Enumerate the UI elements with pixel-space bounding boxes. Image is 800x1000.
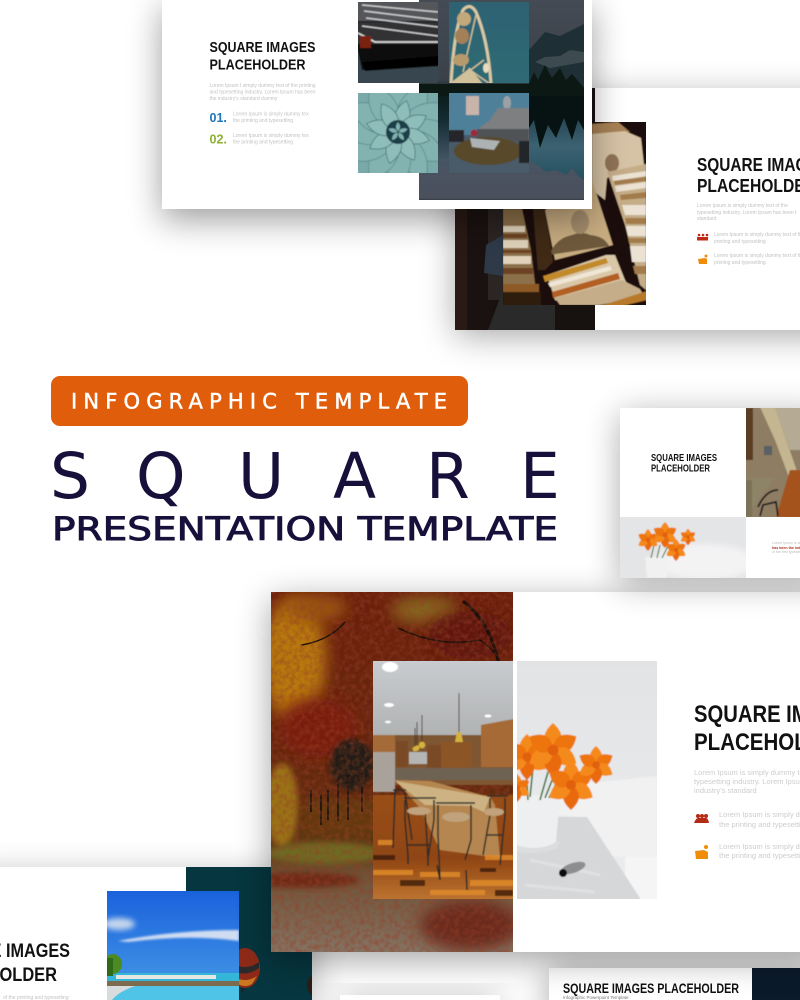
icon: people group xyxy=(694,814,709,823)
text block: slide three caption xyxy=(772,541,800,554)
panel: slide with dark teal and beach (bottom left) xyxy=(0,867,312,1000)
photo: orange lilies in vase xyxy=(517,661,657,899)
subtitle: presentation template: PRESENTATION TEMPLATE xyxy=(52,510,558,548)
text block: slide two description xyxy=(697,203,797,222)
text block: item 01: Lorem Ipsum is simply dummy tex xyxy=(233,112,309,118)
text block: item 01 xyxy=(233,112,309,124)
photo: tropical beach xyxy=(107,891,239,1000)
panel: partly visible slide (bottom centre) xyxy=(340,995,500,1000)
panel: small slide with flowers (right) xyxy=(619,407,800,584)
text block: slide two description: typesetting industry. Lorem Ipsum has been t xyxy=(697,210,797,216)
badge: infographic template xyxy=(51,376,468,426)
number: 02: 02. xyxy=(210,132,227,146)
heading: slide four title xyxy=(694,701,800,756)
heading: slide six title: SQUARE IMAGES PLACEHOLDER xyxy=(563,981,739,996)
heading: slide three title xyxy=(651,453,717,474)
photo: kitchen interior xyxy=(373,661,513,899)
text block: slide two description: Lorem Ipsum is simply dummy text of the xyxy=(697,203,788,209)
text block: item 01: the printing and typesetting xyxy=(233,118,293,124)
text block: slide four description xyxy=(694,768,800,795)
heading: slide one title xyxy=(210,40,316,74)
heading: slide one title: PLACEHOLDER xyxy=(210,58,306,74)
text block: slide four item two xyxy=(719,842,800,860)
text block: slide one description: the industry's standard dummy xyxy=(210,96,278,102)
badge: infographic template: INFOGRAPHIC TEMPLATE xyxy=(71,390,447,414)
text block: slide one description xyxy=(210,83,316,102)
photo: succulent xyxy=(358,93,438,173)
number: 01: 01. xyxy=(210,111,227,125)
heading: slide five title xyxy=(0,941,70,1000)
title: square: SQUARE xyxy=(50,440,560,513)
panel: large autumn and kitchen slide xyxy=(240,592,800,960)
photo: hallway with wooden floor xyxy=(746,408,800,517)
photo: head fragment xyxy=(307,976,312,995)
photo: dark brick alley xyxy=(455,88,595,330)
heading: slide three title: PLACEHOLDER xyxy=(651,464,711,474)
panel: slide with old books xyxy=(455,88,800,336)
icon: orange worker xyxy=(695,845,708,859)
text block: item 02 xyxy=(233,133,309,146)
text block: slide two item one: printing and typesetting xyxy=(714,239,766,245)
text block: slide one description: Lorem Ipsum I simply dummy text of the printing xyxy=(210,83,316,89)
panel: slide with navy image (bottom right) xyxy=(549,968,800,1000)
photo: ferris wheel xyxy=(449,2,529,83)
photo: mountain lake backdrop xyxy=(419,0,584,200)
text block: slide four item one xyxy=(719,810,800,829)
panel: top slide with square images xyxy=(162,0,592,220)
photo: hot air balloon xyxy=(230,948,260,992)
text block: slide one description: and typesetting industry. Lorem Ipsum has been xyxy=(210,90,316,96)
photo: blue living room xyxy=(449,93,529,166)
text block: slide two item two xyxy=(714,253,800,266)
heading: slide one title: SQUARE IMAGES xyxy=(210,40,316,56)
text block: item 02: Lorem Ipsum is simply dummy tex xyxy=(233,133,309,139)
heading: slide two title xyxy=(697,155,800,196)
text block: slide three caption: of the first typeset xyxy=(772,550,800,554)
photo: rowing boats xyxy=(358,2,438,83)
photo: old books and portrait xyxy=(503,122,646,305)
text block: slide four description: industry's standard xyxy=(694,786,757,795)
text block: item 02: the printing and typesetting xyxy=(233,140,293,146)
text block: slide two description: standard xyxy=(697,216,717,222)
heading: slide three title: SQUARE IMAGES xyxy=(651,453,717,464)
icon: orange worker small xyxy=(698,254,708,264)
icon: people group small xyxy=(697,234,708,240)
subtitle: slide six: Infographic Powerpoint Template xyxy=(563,995,629,1000)
photo: flowers on white bed xyxy=(620,517,746,578)
photo: autumn forest xyxy=(271,592,513,952)
text block: slide two item one xyxy=(714,232,800,245)
text block: slide two item two: printing and typesetting xyxy=(714,260,766,266)
